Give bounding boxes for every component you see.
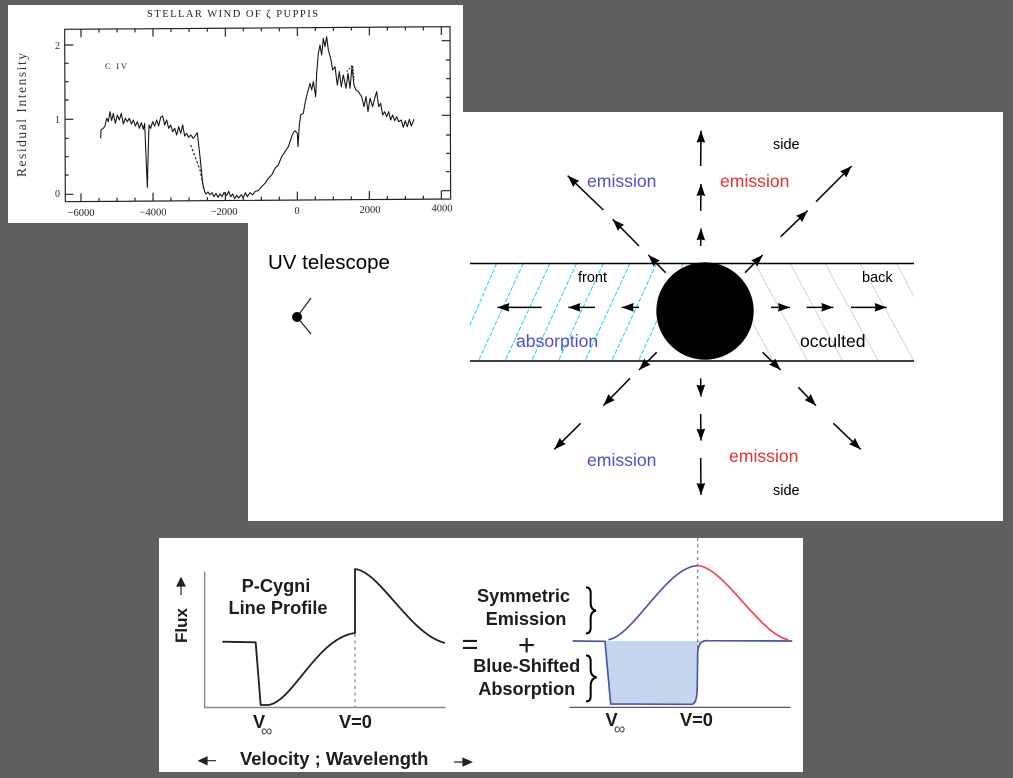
x axis numbers: 0 [294,206,300,217]
UV telescope label: UV telescope [268,251,390,274]
line label C IV: C IV [105,61,128,71]
absorption and emission components [569,538,792,707]
right V=0 label: V=0 [680,710,713,730]
left profile axes [205,572,446,708]
left V infinity label [253,712,272,740]
braces [586,587,597,701]
y axis numbers: 2 [55,41,60,52]
left profile V=0 dashed marker [354,569,356,707]
observed spectrum curve [101,37,414,199]
x axis label: Velocity ; Wavelength [240,748,428,769]
x axis numbers: −6000 [68,208,94,219]
x axis numbers: −4000 [140,208,166,218]
diagram labels: absorption [516,331,598,351]
component labels: Blue-Shifted [473,656,580,676]
diagram labels: side [773,137,800,153]
plot frame and ticks [65,27,451,202]
left V=0 label: V=0 [339,712,372,732]
component labels: Emission [486,609,566,629]
x axis numbers: −2000 [211,207,237,218]
right V infinity label: V [606,710,618,730]
wind column boundary lines [470,264,914,361]
left profile title: P-Cygni [242,576,310,596]
icon: UV telescope [292,298,311,334]
diagram labels: back [862,270,893,286]
right V infinity label [606,710,625,738]
component labels [473,586,580,699]
y axis label: Residual Intensity [14,53,29,177]
horizontal arrows inside the column [497,305,887,310]
outflow arrows below the column [554,352,861,495]
component labels: Symmetric [477,586,570,606]
diagram labels: emission [587,171,656,191]
arrow: flux up [177,578,185,595]
y axis label Flux: Flux [172,608,191,643]
star [656,262,754,360]
left V infinity label: ∞ [261,723,272,740]
panel: P-Cygni line profile explanation [159,538,803,772]
y axis numbers: 0 [55,189,60,200]
left profile title [228,576,328,618]
x axis numbers: 2000 [360,205,380,216]
outflow arrows above the column [568,131,852,273]
diagram labels: emission [729,446,798,466]
diagram labels: side [773,483,800,499]
diagram labels: emission [587,450,656,470]
y axis numbers: 1 [55,115,60,126]
panel: stellar wind diagram [248,112,1003,521]
left profile title: Line Profile [228,598,328,618]
equals sign: = [462,629,478,661]
diagram labels: occulted [800,331,866,351]
arrow: velocity left [199,757,216,764]
diagram labels: front [578,270,607,286]
diagram labels: emission [720,171,789,191]
x axis numbers [68,204,452,219]
hatching: absorption column in front of star [470,263,683,361]
component labels: Absorption [478,679,575,699]
chart title: STELLAR WIND OF ζ PUPPIS [147,9,318,20]
P-Cygni profile curve [222,569,445,705]
hatching: occulted column behind star [720,263,914,361]
panel: spectrum chart of zeta Puppis [8,5,463,223]
x axis numbers: 4000 [432,204,452,214]
left V infinity label: V [253,712,265,732]
arrow: wavelength right [454,758,472,766]
y axis numbers [55,41,60,200]
plus sign: + [518,629,535,662]
right V infinity label: ∞ [614,721,625,738]
diagram labels [516,137,893,499]
